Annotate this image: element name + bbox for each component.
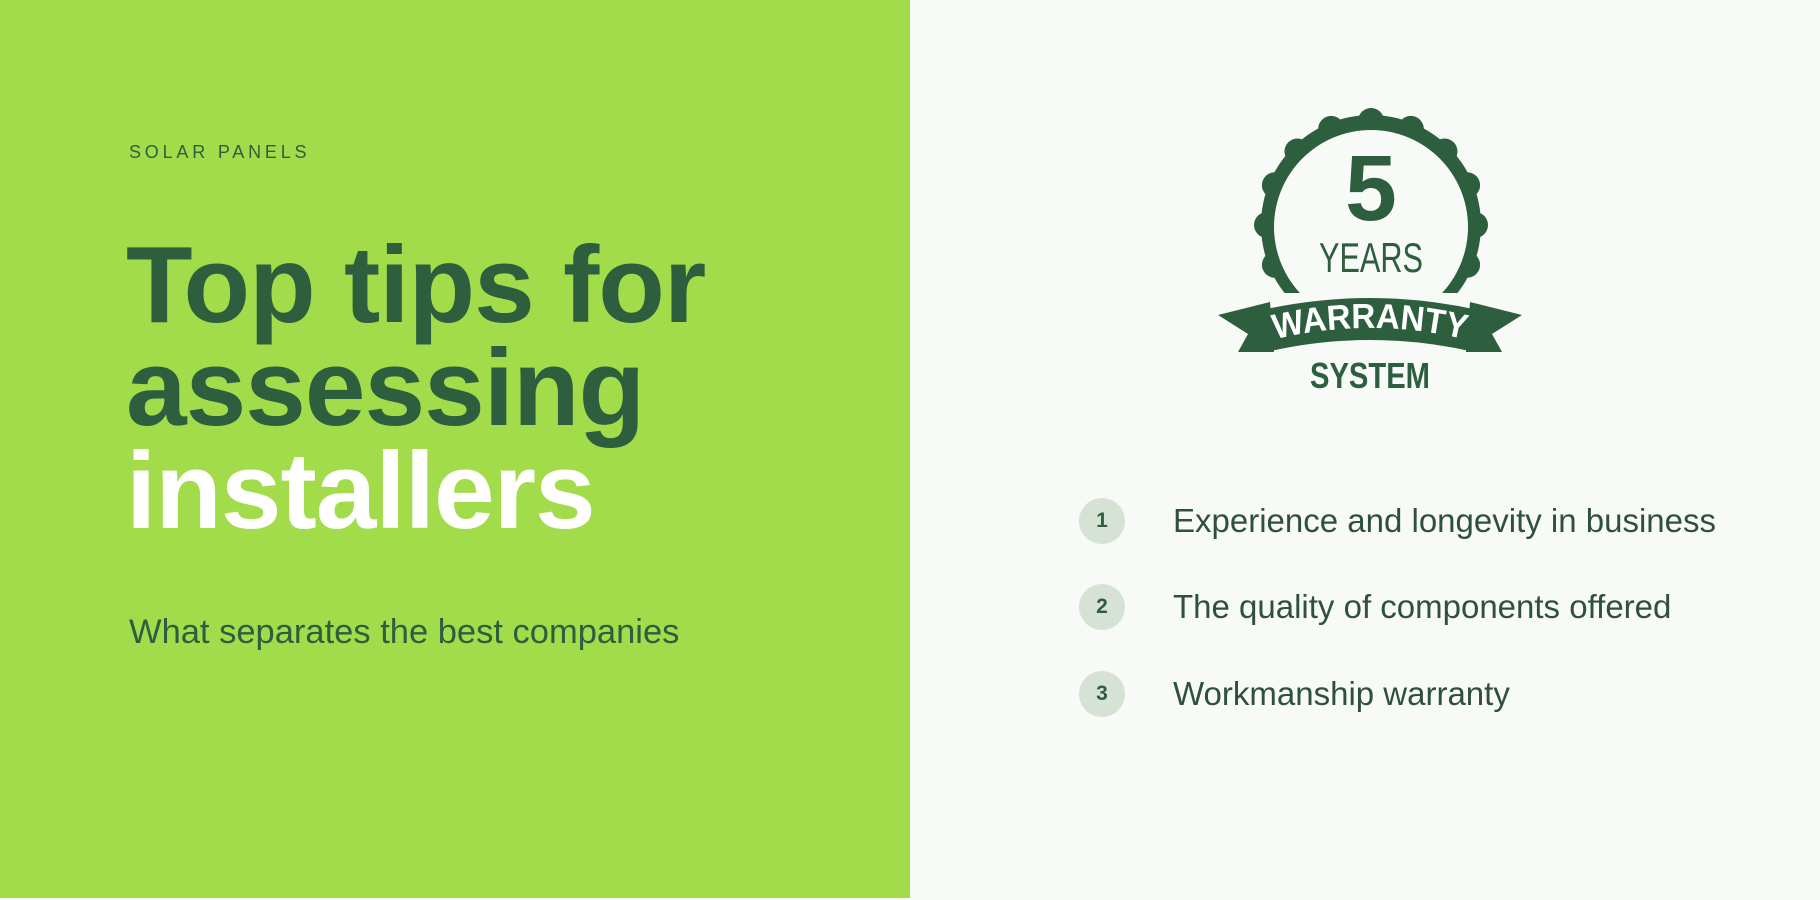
list item 2: The quality of components offered xyxy=(1173,588,1671,625)
badge ribbon: WARRANTY xyxy=(1270,304,1470,338)
title: assessing xyxy=(126,327,644,449)
list item 3: 3 xyxy=(1096,682,1108,705)
subtitle: What separates the best companies xyxy=(129,613,679,651)
list item 1: Experience and longevity in business xyxy=(1173,502,1716,539)
list item 1: 1 xyxy=(1096,509,1108,532)
badge ribbon xyxy=(1218,298,1522,352)
list item 2: 2 xyxy=(1096,595,1108,618)
title: installers xyxy=(126,430,595,552)
title: Top tips for xyxy=(126,224,705,346)
badge number 5: 5 xyxy=(1345,136,1397,240)
list item 3: Workmanship warranty xyxy=(1173,675,1510,712)
badge system: SYSTEM xyxy=(1310,355,1430,396)
title xyxy=(126,224,705,552)
list item 3 xyxy=(1079,671,1510,717)
list item 1 xyxy=(1079,498,1716,544)
icon: warranty badge xyxy=(1218,108,1522,396)
list item 2 xyxy=(1079,584,1671,630)
kicker: solar panels: SOLAR PANELS xyxy=(129,142,310,162)
panel: green left xyxy=(0,0,910,898)
badge years: YEARS xyxy=(1319,234,1423,281)
